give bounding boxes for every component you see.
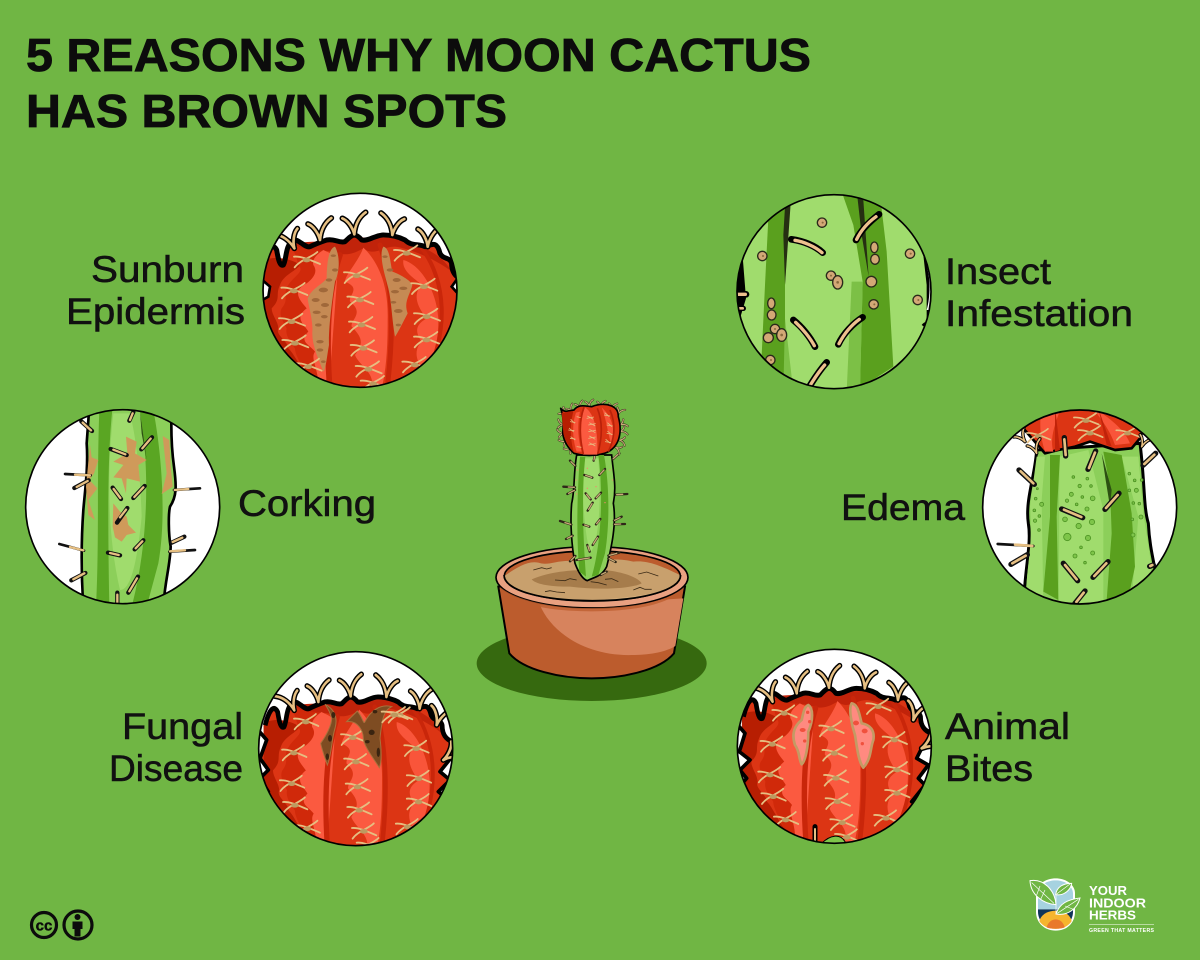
panel: animal bites bbox=[736, 648, 1068, 844]
edema droplets bbox=[1033, 472, 1143, 564]
brown sunburn patches bbox=[308, 247, 412, 372]
red head cap bbox=[1024, 410, 1143, 455]
title: HAS BROWN SPOTS bbox=[26, 85, 507, 137]
central potted moon cactus bbox=[477, 400, 707, 701]
label: animal bites: Bites bbox=[945, 748, 1033, 789]
pot bbox=[496, 547, 688, 678]
panel: sunburn epidermis bbox=[69, 192, 458, 388]
brown corking patches bbox=[86, 436, 173, 542]
label: sunburn epidermis: Sunburn bbox=[91, 249, 244, 290]
worms bbox=[735, 214, 879, 388]
soil bbox=[505, 560, 680, 600]
label: corking: Corking bbox=[238, 483, 376, 524]
cactus head bbox=[556, 400, 628, 455]
label: insect infestation bbox=[945, 251, 1133, 334]
label: insect infestation: Insect bbox=[945, 251, 1052, 292]
label: fungal disease: Fungal bbox=[122, 706, 243, 747]
logo wordmark: GREEN THAT MATTERS bbox=[1089, 928, 1155, 934]
label: edema: Edema bbox=[841, 487, 965, 528]
spines bbox=[59, 412, 200, 607]
logo wordmark bbox=[1089, 884, 1155, 934]
label: insect infestation: Infestation bbox=[945, 293, 1133, 334]
illustration: edema droplets on stem bbox=[982, 409, 1178, 605]
illustration: bitten cactus head bbox=[736, 648, 932, 844]
label: sunburn epidermis: Epidermis bbox=[66, 291, 245, 332]
label: animal bites: Animal bbox=[945, 706, 1070, 747]
label: fungal disease bbox=[109, 706, 243, 789]
spines bbox=[998, 438, 1156, 603]
label: animal bites bbox=[945, 706, 1070, 789]
illustration: fungal cactus head bbox=[258, 650, 454, 846]
ground shadow bbox=[477, 626, 707, 701]
logo wordmark: HERBS bbox=[1089, 908, 1136, 922]
logo wordmark: YOUR bbox=[1089, 884, 1127, 898]
title: 5 REASONS WHY MOON CACTUS bbox=[26, 29, 811, 81]
bite wounds bbox=[793, 703, 874, 768]
panel: corking bbox=[20, 400, 376, 613]
icon: creative commons attribution: cc bbox=[36, 918, 52, 934]
illustration: sunburned cactus head bbox=[262, 192, 458, 388]
logo wordmark: INDOOR bbox=[1089, 896, 1146, 910]
panel: edema bbox=[844, 409, 1178, 605]
label: sunburn epidermis bbox=[66, 249, 245, 332]
title bbox=[26, 29, 811, 137]
cactus stem bbox=[560, 453, 627, 581]
insect eggs bbox=[758, 218, 922, 365]
illustration: insects on green stem bbox=[736, 194, 932, 390]
panel: insect infestation bbox=[730, 185, 1133, 398]
panel: fungal disease bbox=[112, 650, 454, 846]
logo: your indoor herbs bbox=[1030, 878, 1155, 934]
fungal lesions bbox=[321, 704, 392, 768]
icon: logo badge bbox=[1030, 878, 1080, 931]
illustration: corked green stem bbox=[24, 408, 220, 604]
label: fungal disease: Disease bbox=[109, 748, 243, 789]
icon: creative commons attribution bbox=[32, 911, 92, 939]
